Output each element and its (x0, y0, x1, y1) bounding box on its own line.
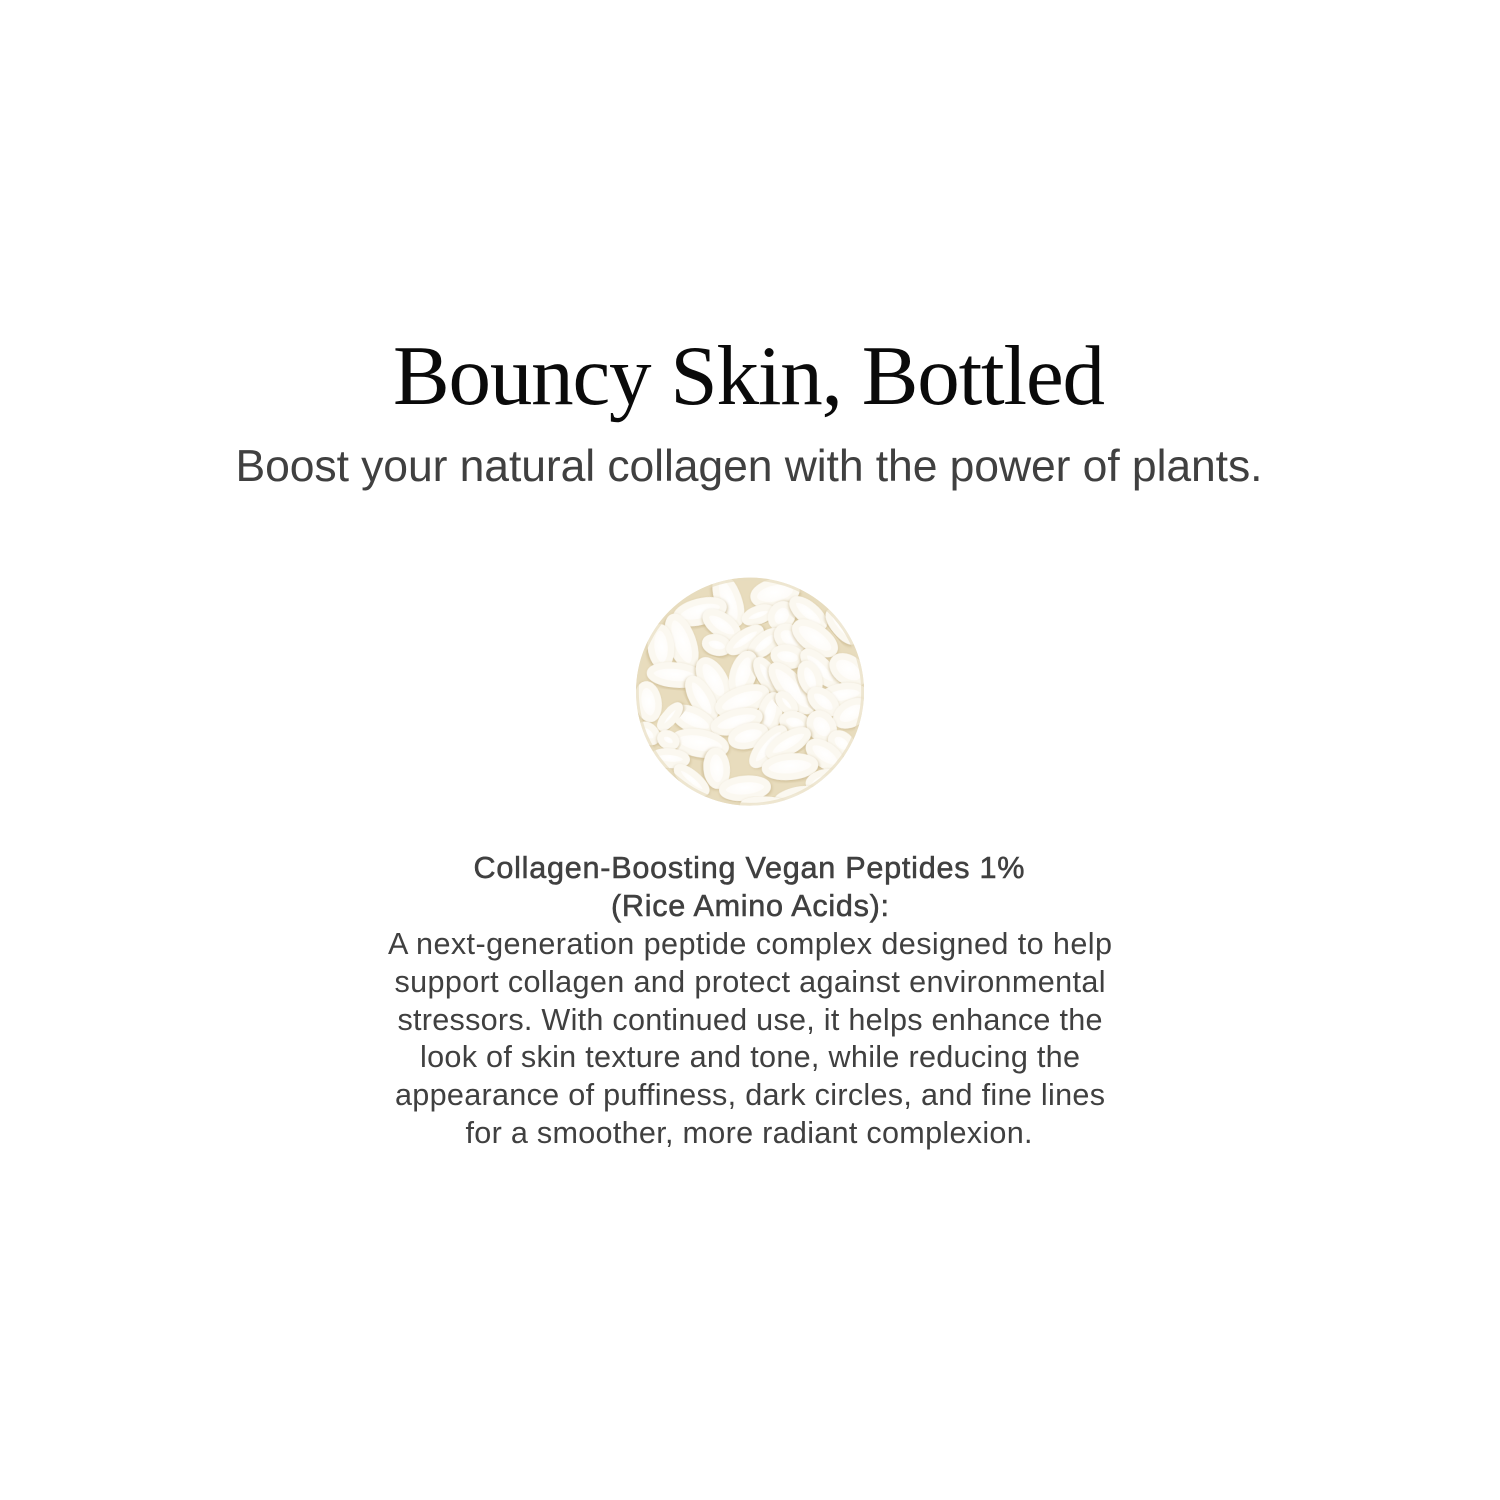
ingredient body text: for a smoother, more radiant complexion. (466, 1116, 1032, 1150)
title: Bouncy Skin, Bottled (393, 329, 1105, 423)
ingredient name: Collagen-Boosting Vegan Peptides 1% (474, 851, 1024, 885)
ingredient body text (388, 927, 1112, 1150)
ingredient body text: stressors. With continued use, it helps enhance the (398, 1003, 1102, 1037)
ingredient body text: support collagen and protect against environmental (394, 965, 1106, 999)
ingredient name (474, 851, 1024, 923)
image: rice grains circle (636, 578, 864, 806)
ingredient body text: look of skin texture and tone, while reducing the (420, 1040, 1080, 1074)
ingredient body text: A next-generation peptide complex designed to help (388, 927, 1112, 961)
ingredient name: (Rice Amino Acids): (611, 889, 889, 923)
subtitle: Boost your natural collagen with the power of plants. (236, 442, 1262, 491)
ingredient body text: appearance of puffiness, dark circles, and fine lines (395, 1078, 1105, 1112)
ingredient description (388, 851, 1112, 1150)
